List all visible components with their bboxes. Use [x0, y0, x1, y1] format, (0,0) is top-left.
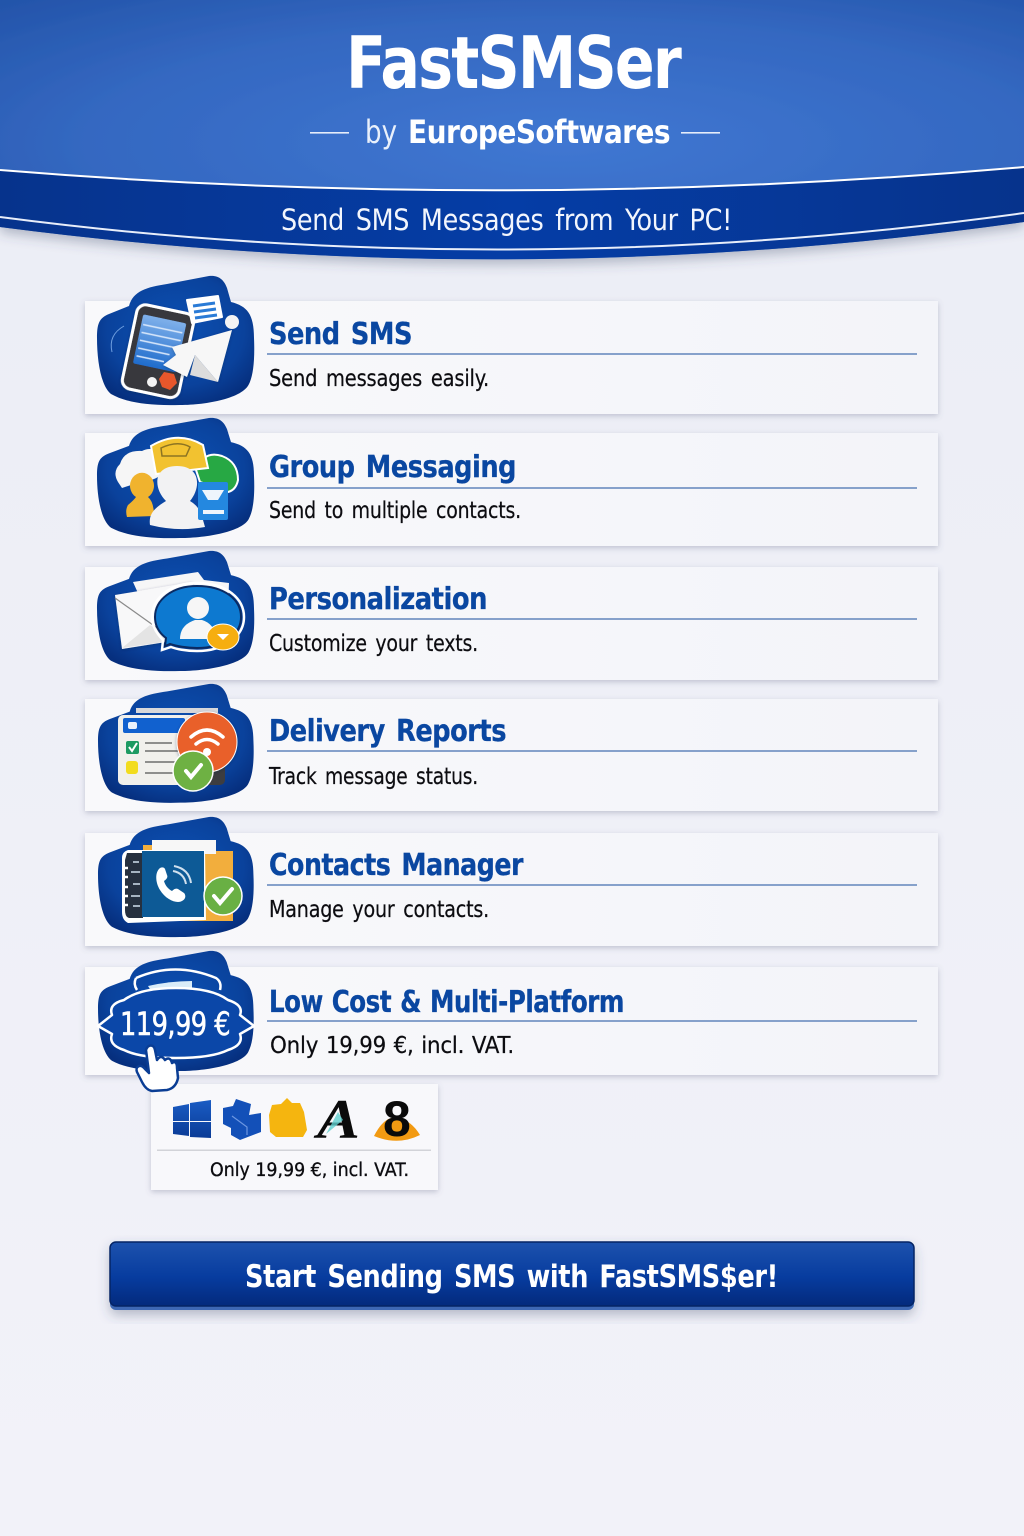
- button: start sending: Start Sending SMS with FastSMS$er!: [245, 1259, 778, 1295]
- icon: address book: [98, 817, 254, 937]
- subtitle: EuropeSoftwares: [408, 113, 670, 151]
- panel: Personalization: [85, 551, 938, 680]
- icon: blue cube: [223, 1099, 261, 1140]
- panel: Group Messaging: [85, 418, 938, 546]
- heading: Send SMS: Send SMS: [269, 317, 412, 352]
- icon: yellow shape: [269, 1098, 307, 1137]
- text: Only 19,99 euro incl. VAT: Only 19,99 €, incl. VAT.: [270, 1033, 514, 1059]
- text: Send messages easily: Send messages easily.: [269, 366, 489, 392]
- text: Customize your texts: Customize your texts.: [269, 631, 478, 657]
- subtitle: [310, 113, 720, 151]
- heading: Group Messaging: Group Messaging: [269, 450, 516, 485]
- text: platform price: Only 19,99 €, incl. VAT.: [210, 1160, 409, 1181]
- header banner: [0, 0, 1024, 259]
- text: Send to multiple contacts: Send to multiple contacts.: [269, 498, 521, 524]
- ribbon: [0, 167, 1024, 259]
- heading: Delivery Reports: Delivery Reports: [269, 714, 506, 749]
- subtitle: by: [365, 113, 397, 151]
- heading: Contacts Manager: Contacts Manager: [269, 848, 524, 883]
- icon: group of people: [97, 418, 254, 538]
- icon: hand pointer: [137, 1046, 178, 1091]
- heading: Low Cost & Multi-Platform: Low Cost & Multi-Platform: [269, 985, 624, 1020]
- icon: orange and black eight: [374, 1091, 420, 1147]
- panel: Delivery Reports: [85, 684, 938, 811]
- icon: report with wifi and check: [98, 684, 254, 803]
- tagline: Send SMS Messages from Your PC!: [281, 203, 732, 237]
- icon: windows: [173, 1100, 211, 1138]
- text: Track message status: Track message status.: [268, 764, 478, 790]
- icon: letter A: A: [314, 1089, 360, 1151]
- icon: envelope with contact bubble: [97, 551, 254, 671]
- panel: supported platforms: [151, 1084, 438, 1190]
- title: FastSMSer: [346, 21, 682, 105]
- price label: 119,99 €: [120, 1005, 230, 1043]
- panel: Low Cost & Multi-Platform: [85, 951, 938, 1075]
- panel: Contacts Manager: [85, 817, 938, 946]
- heading: Personalization: Personalization: [269, 582, 487, 617]
- icon: price tag: [98, 951, 254, 1071]
- panel: Send SMS: [85, 276, 938, 414]
- icon: phone and envelope: [97, 276, 254, 405]
- button: start sending: [110, 1242, 914, 1310]
- text: Manage your contacts: Manage your contacts.: [269, 897, 489, 923]
- icon: orange and black eight: 8: [383, 1091, 411, 1147]
